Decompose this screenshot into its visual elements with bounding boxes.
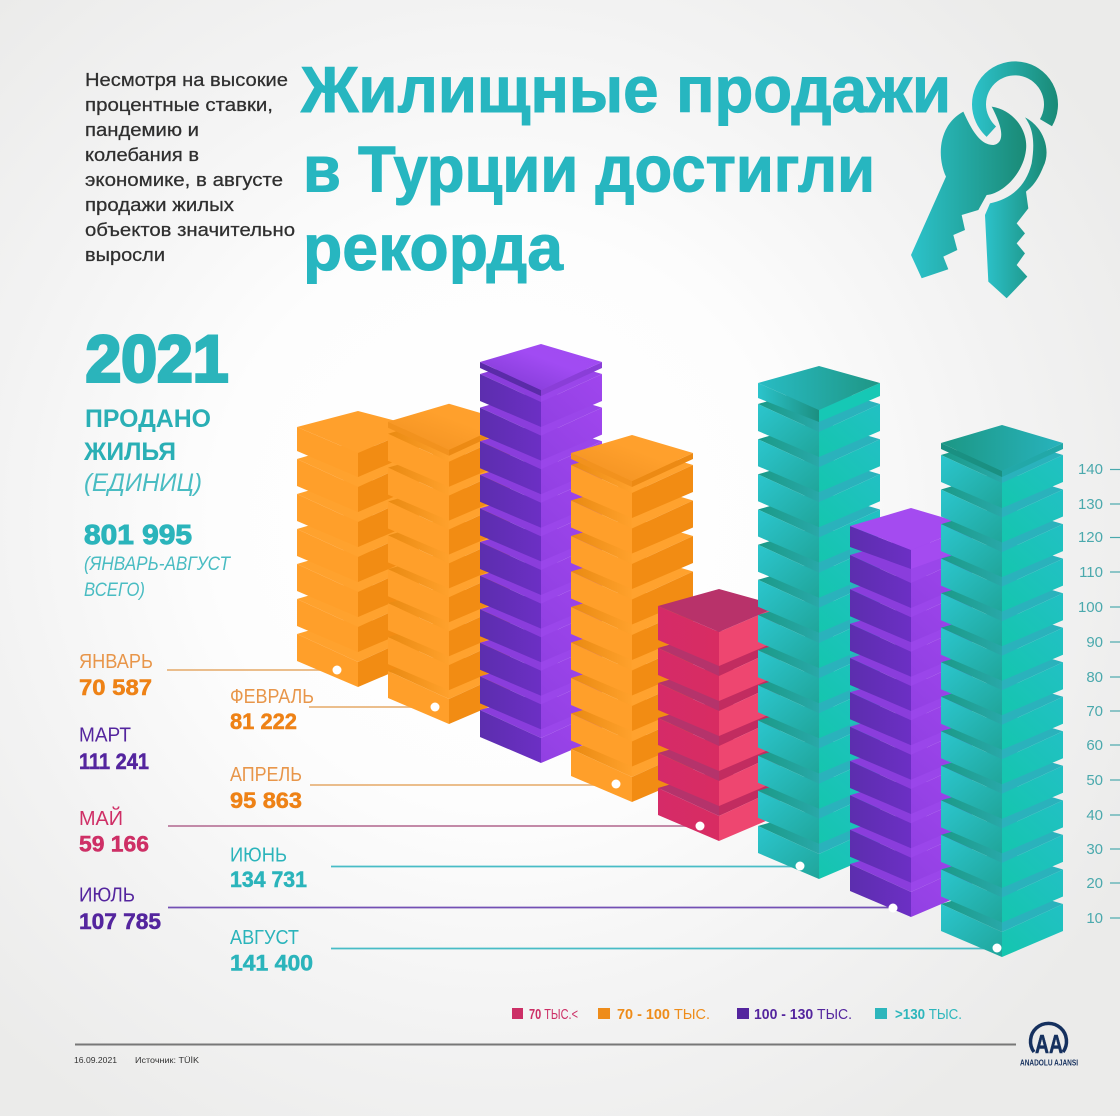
tower: июль bbox=[850, 508, 972, 917]
label: июнь: 134 731 bbox=[230, 867, 307, 892]
label: февраль: 81 222 bbox=[230, 709, 297, 734]
intro text: экономике, в августе bbox=[85, 170, 283, 190]
intro text: пандемию и bbox=[85, 120, 199, 140]
y axis scale: 80 bbox=[1086, 669, 1103, 686]
year heading: (ЕДИНИЦ) bbox=[84, 469, 202, 497]
label: июнь bbox=[230, 844, 307, 892]
legend: 100 - 130 ТЫС. bbox=[754, 1006, 852, 1023]
tower: август bbox=[941, 425, 1063, 957]
footer: date and source: Источник: TÜİK bbox=[135, 1055, 199, 1065]
label: апрель: АПРЕЛЬ bbox=[230, 764, 302, 786]
tower: май bbox=[658, 589, 780, 841]
label: январь: 70 587 bbox=[79, 675, 152, 700]
label: февраль: ФЕВРАЛЬ bbox=[230, 686, 314, 708]
y axis scale: 120 bbox=[1078, 529, 1103, 546]
icon: keys bbox=[911, 68, 1051, 298]
legend: >130 ТЫС. bbox=[895, 1006, 962, 1023]
legend: 70 ТЫС.< bbox=[529, 1006, 578, 1023]
y axis scale: 20 bbox=[1086, 875, 1103, 892]
legend: 70 - 100 ТЫС. bbox=[617, 1006, 710, 1023]
intro text: колебания в bbox=[85, 145, 199, 165]
tower: январь bbox=[297, 411, 419, 687]
intro text: продажи жилых bbox=[85, 195, 234, 215]
tower: февраль bbox=[388, 404, 510, 724]
label: июль bbox=[79, 884, 161, 934]
y axis scale: 90 bbox=[1086, 634, 1103, 651]
y axis scale: 50 bbox=[1086, 772, 1103, 789]
total sales bbox=[84, 519, 231, 601]
label: июнь: ИЮНЬ bbox=[230, 844, 287, 866]
year heading: ПРОДАНО bbox=[85, 405, 211, 433]
label: февраль bbox=[230, 686, 314, 734]
total sales: (ЯНВАРЬ-АВГУСТ bbox=[84, 554, 231, 575]
footer: date and source: 16.09.2021 bbox=[74, 1055, 117, 1065]
label: июль: 107 785 bbox=[79, 909, 161, 934]
label: май: 59 166 bbox=[79, 832, 149, 856]
label: январь bbox=[79, 651, 153, 700]
label: март: 111 241 bbox=[79, 749, 149, 774]
tower: июнь bbox=[758, 366, 880, 879]
label: март bbox=[79, 724, 149, 774]
title: Жилищные продажи bbox=[300, 53, 951, 126]
label: май: МАЙ bbox=[79, 806, 123, 830]
total sales: 801 995 bbox=[84, 519, 192, 550]
label: май bbox=[79, 806, 149, 856]
y axis scale: 140 bbox=[1078, 461, 1103, 478]
label: август: 141 400 bbox=[230, 950, 313, 976]
title: рекорда bbox=[303, 211, 564, 284]
y axis scale: 60 bbox=[1086, 737, 1103, 754]
logo: Anadolu Ajansi bbox=[1020, 1023, 1078, 1068]
legend bbox=[512, 1006, 962, 1023]
y axis scale: 10 bbox=[1086, 910, 1103, 927]
title: в Турции достигли bbox=[303, 132, 875, 206]
label: август: АВГУСТ bbox=[230, 927, 299, 949]
footer: date and source bbox=[74, 1055, 199, 1065]
y axis scale: 70 bbox=[1086, 703, 1103, 720]
intro text: объектов значительно bbox=[85, 220, 295, 240]
intro text: Несмотря на высокие bbox=[85, 70, 288, 90]
y axis scale: 40 bbox=[1086, 807, 1103, 824]
label: июль: ИЮЛЬ bbox=[79, 884, 135, 906]
label: август bbox=[230, 927, 313, 976]
label: январь: ЯНВАРЬ bbox=[79, 651, 153, 673]
logo: Anadolu Ajansi: AA bbox=[1035, 1029, 1063, 1059]
leader lines bbox=[167, 670, 997, 948]
intro text: выросли bbox=[85, 245, 165, 265]
leader dots bbox=[332, 666, 1002, 952]
label: апрель bbox=[230, 764, 302, 813]
title bbox=[300, 53, 951, 284]
logo: Anadolu Ajansi: ANADOLU AJANSI bbox=[1020, 1058, 1078, 1068]
tower: апрель bbox=[571, 435, 693, 802]
y axis scale: 130 bbox=[1078, 496, 1103, 513]
intro text: процентные ставки, bbox=[85, 95, 273, 115]
label: март: МАРТ bbox=[79, 724, 131, 746]
y axis scale: 30 bbox=[1086, 841, 1103, 858]
tower: март bbox=[480, 344, 602, 763]
y axis scale: 100 bbox=[1078, 599, 1103, 616]
year heading: 2021 bbox=[86, 322, 228, 396]
year heading bbox=[83, 322, 228, 497]
y axis scale bbox=[1078, 461, 1120, 927]
total sales: ВСЕГО) bbox=[84, 580, 145, 601]
y axis scale: 110 bbox=[1079, 564, 1103, 581]
intro text bbox=[85, 70, 295, 265]
year heading: ЖИЛЬЯ bbox=[83, 438, 176, 466]
label: апрель: 95 863 bbox=[230, 788, 302, 813]
